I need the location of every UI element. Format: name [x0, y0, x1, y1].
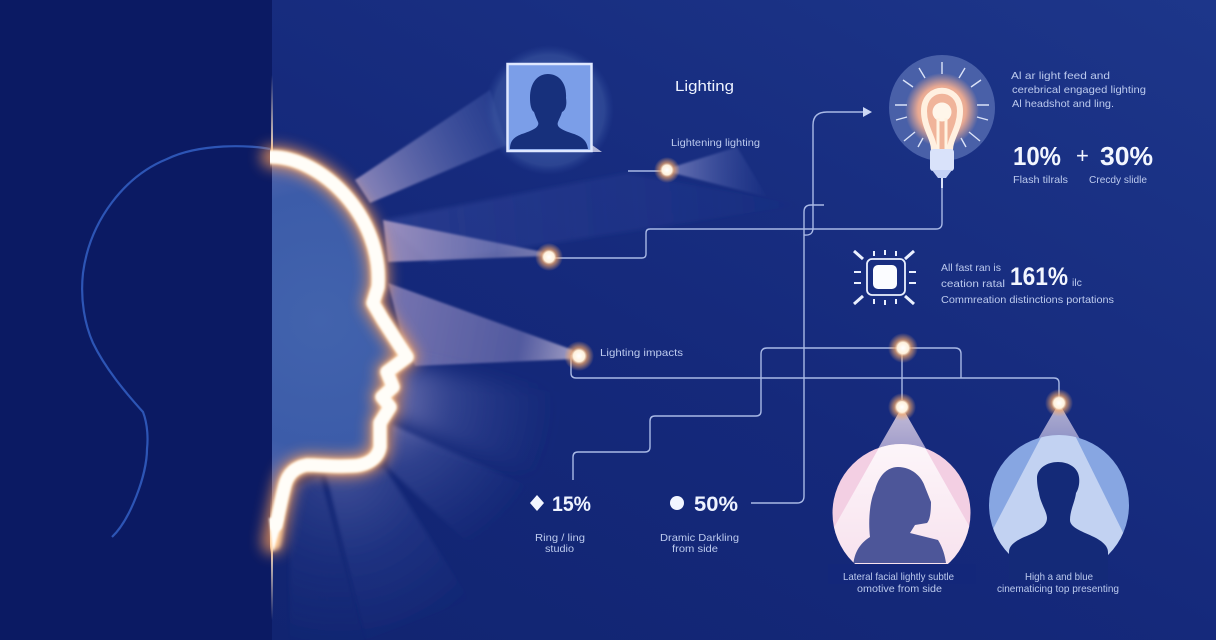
glow nodes [535, 157, 918, 371]
stats: 10% + 30%: Flash tilrals [1013, 174, 1068, 186]
portrait icon [484, 45, 614, 175]
bulb icon [889, 55, 995, 188]
chip icon [854, 250, 916, 305]
chip description: 161% [1010, 263, 1068, 291]
stat: 15% ring lighting: 15% [552, 493, 591, 516]
stat: 50% dramatic lighting [660, 493, 739, 555]
stats: 10% + 30%: + [1076, 143, 1089, 168]
bulb description: cerebrical engaged lighting [1012, 84, 1146, 96]
stat: 50% dramatic lighting: 50% [694, 493, 738, 516]
stat: 15% ring lighting [530, 493, 591, 555]
left head outline [82, 146, 270, 537]
connector arrowhead [863, 107, 872, 117]
chip description: All fast ran is [941, 262, 1001, 274]
stats: 10% + 30%: 10% [1013, 141, 1061, 171]
caption: woman: Lateral facial lightly subtle [843, 571, 954, 583]
stats: 10% + 30%: Crecdy slidle [1089, 174, 1147, 186]
light rays from face [290, 90, 800, 640]
centre vertical light streaks [271, 75, 273, 620]
stats: 10% + 30%: 30% [1100, 141, 1153, 171]
portrait: woman side lighting [832, 394, 970, 564]
chip description: ceation ratal [941, 278, 1005, 290]
bulb description [1011, 70, 1146, 110]
stat: 50% dramatic lighting: from side [672, 543, 718, 555]
heading: Lighting [675, 79, 734, 95]
caption: woman [843, 571, 954, 595]
stat: 50% dramatic lighting: Dramic Darkling [660, 532, 739, 544]
chip description: Commreation distinctions portations [941, 294, 1114, 306]
stat: 15% ring lighting: studio [545, 543, 574, 555]
caption: man [997, 571, 1119, 595]
label: lighting: Lightening lighting [671, 137, 760, 149]
caption: woman: omotive from side [857, 583, 942, 595]
portrait: man top lighting [989, 390, 1129, 555]
bulb description: Al headshot and ling. [1012, 98, 1114, 110]
label: lighting impacts: Lighting impacts [600, 347, 683, 359]
caption: man: High a and blue [1025, 571, 1093, 583]
connector lines [549, 112, 1059, 503]
stat: 15% ring lighting: Ring / ling [535, 532, 585, 544]
left dark panel [0, 0, 272, 640]
bulb description: Al ar light feed and [1011, 70, 1110, 82]
caption: man: cinematicing top presenting [997, 583, 1119, 595]
glowing face profile [269, 157, 407, 552]
stats: 10% + 30% [1013, 141, 1153, 186]
chip description [941, 262, 1114, 306]
face fill [272, 155, 408, 547]
chip description: ilc [1072, 277, 1082, 289]
